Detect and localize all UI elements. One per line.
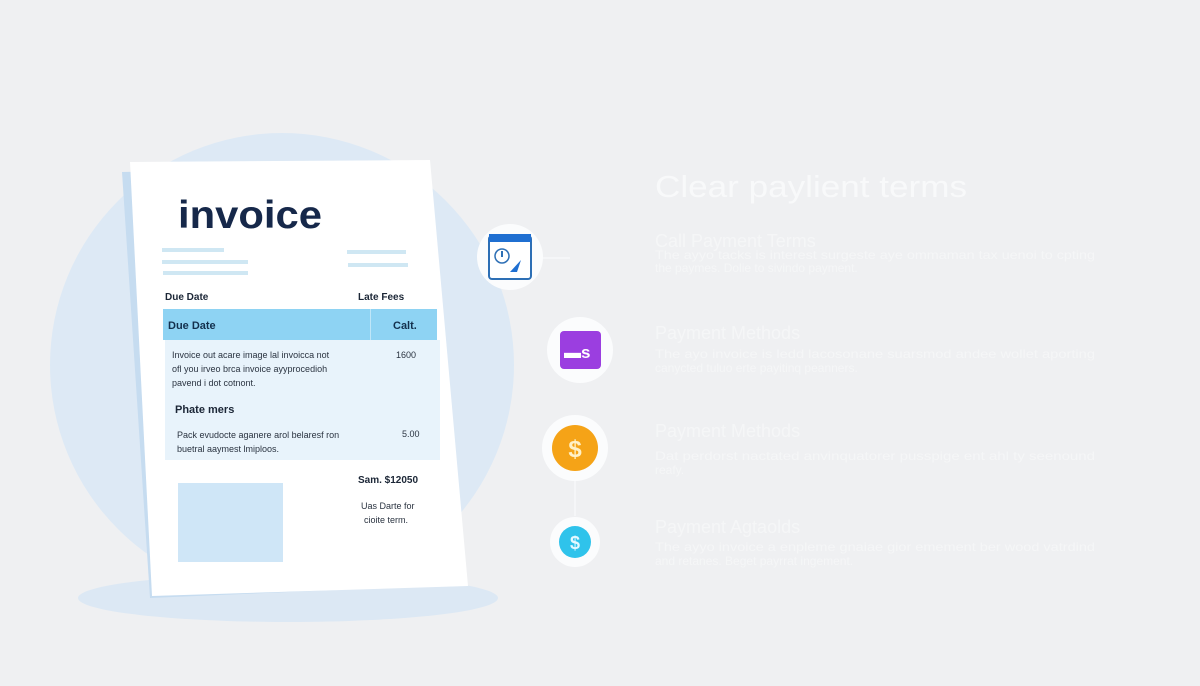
connectors <box>542 257 570 259</box>
shadow ellipse <box>78 574 498 622</box>
background circle <box>50 133 514 597</box>
icon: orange dollar <box>542 415 608 481</box>
item 2: canycted tuluo erte payitinq peanners. <box>655 361 858 375</box>
table: ofl you irveo brca invoice ayyprocedioh <box>172 364 327 374</box>
item 1: the paymes. Dolie to sivindo payment. <box>655 261 858 275</box>
invoice document: Uas Darte for <box>361 501 415 511</box>
invoice document <box>122 160 468 598</box>
item 4: Payment Agtaolds <box>655 517 800 537</box>
table: Due Date <box>165 292 209 303</box>
item 4: The ayyo invoice a enpleme gnaiae gior emement ber wood vatrdind <box>655 540 1095 554</box>
item 3: reafy. <box>655 463 684 477</box>
icon: purple card <box>547 317 613 383</box>
item 1: The ayyo tacks is interest surgeste aye ommaman tax uenoi to cpting <box>655 248 1095 262</box>
title: Clear paylient terms <box>655 169 967 204</box>
item 4: and retanes. Beget payrrat ingement. <box>655 554 853 568</box>
icon: purple card: ▬s <box>564 343 590 362</box>
item 2: Payment Methods <box>655 323 800 343</box>
blue box <box>178 483 283 562</box>
icon: calendar <box>477 224 543 290</box>
table: Pack evudocte aganere arol belaresf ron <box>177 430 339 440</box>
item 3 <box>655 421 1095 477</box>
table: Late Fees <box>358 292 405 303</box>
table: Due Date <box>168 320 216 332</box>
invoice title: invoice <box>178 194 322 237</box>
item 1: Call Payment Terms <box>655 231 816 251</box>
total: Sam. $12050 <box>358 475 418 486</box>
table: Invoice out acare image lal invoicca not <box>172 350 330 360</box>
item 2 <box>655 323 1095 375</box>
item 3: Dat perdorst nactated anvinquatorer pusspige ent ahl ty seenound <box>655 449 1095 463</box>
invoice document: cioite term. <box>364 515 408 525</box>
item 1 <box>655 231 1095 275</box>
table: 5.00 <box>402 429 420 439</box>
table: pavend i dot cotnont. <box>172 378 256 388</box>
icon: cyan dollar: $ <box>570 533 580 553</box>
table: buetral aaymest lmiploos. <box>177 444 279 454</box>
table: Calt. <box>393 320 417 332</box>
item 3: Payment Methods <box>655 421 800 441</box>
icon: orange dollar: $ <box>568 436 582 463</box>
item 2: The ayo invoice is ledd lacosonane suarsmod andee wollet aporting <box>655 347 1095 361</box>
item 4 <box>655 517 1095 568</box>
table: Phate mers <box>175 404 234 416</box>
table: 1600 <box>396 350 416 360</box>
table <box>163 292 440 460</box>
icon: cyan dollar <box>550 517 600 567</box>
